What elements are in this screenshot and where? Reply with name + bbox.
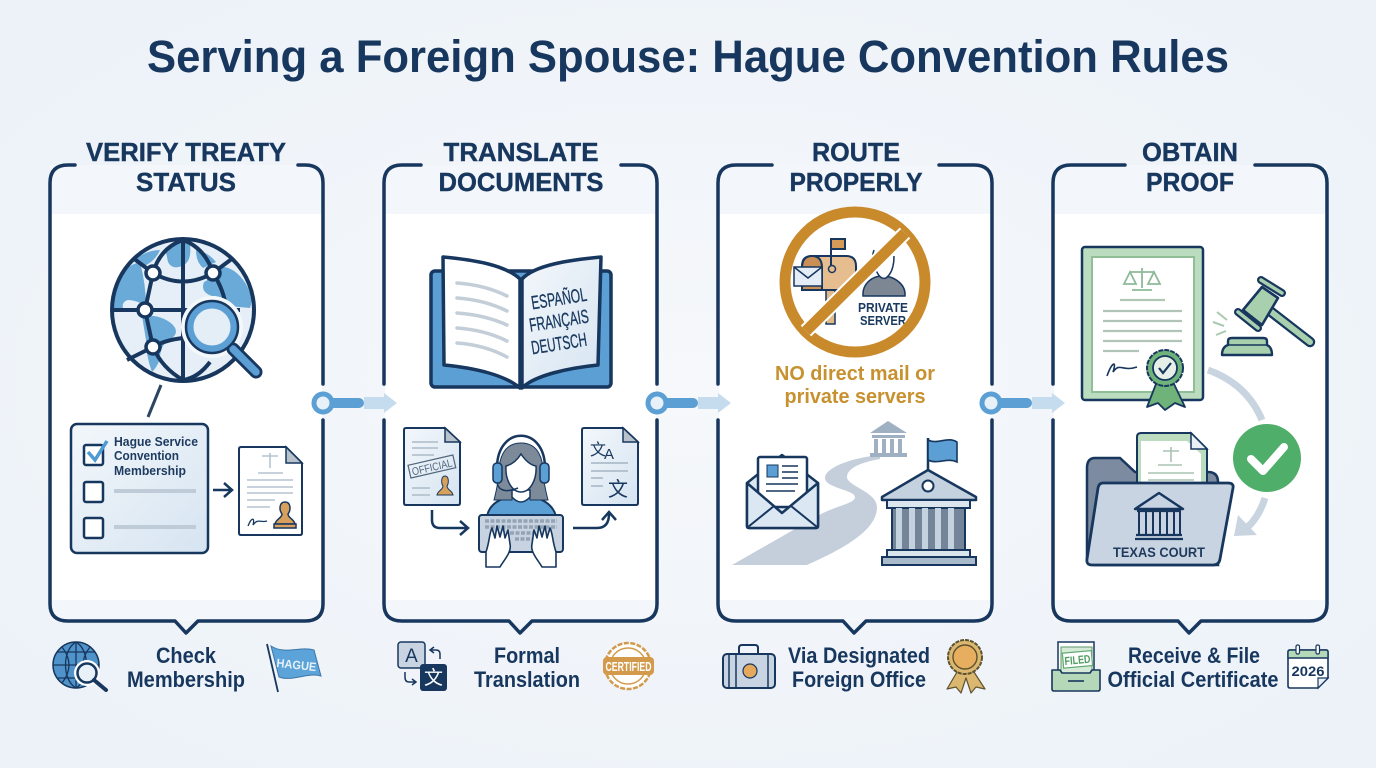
icon: Texas court folder <box>1087 433 1233 565</box>
warning text: NO direct mail or <box>775 363 935 385</box>
icon: certified badge: CERTIFIED <box>606 660 652 674</box>
title: Serving a Foreign Spouse: Hague Convention Rules <box>147 31 1229 82</box>
arrow: step 3 to step 4 <box>982 393 1065 413</box>
label: receive and file official certificate <box>1108 643 1278 692</box>
arrow: document to translator <box>432 510 468 535</box>
arrow: step 2 to step 3 <box>648 393 731 413</box>
icon: filed tray <box>1052 642 1100 691</box>
warning text: private servers <box>784 386 926 408</box>
heading: verify treaty status: VERIFY TREATY <box>86 137 286 167</box>
heading: obtain proof <box>1142 137 1238 197</box>
icon: translator with headset at keyboard <box>479 436 563 567</box>
footer: check membership <box>53 642 321 692</box>
icon: Hague flag: HAGUE <box>276 656 317 674</box>
icon: stamped document <box>239 447 302 535</box>
label: formal translation: Translation <box>474 667 580 692</box>
icon: translated document: 文 <box>608 478 628 501</box>
label: via designated foreign office: Foreign Office <box>792 667 926 692</box>
heading: translate documents: DOCUMENTS <box>438 167 604 197</box>
icon: open book: FRANÇAIS <box>528 307 590 337</box>
panel: obtain proof <box>1053 137 1327 633</box>
icon: prohibited mail and private server: PRIVATE <box>858 301 908 315</box>
warning text <box>775 363 935 408</box>
label: receive and file official certificate: Receive & File <box>1128 643 1260 668</box>
icon: translate symbols: A <box>405 646 418 667</box>
heading: obtain proof: PROOF <box>1146 167 1234 197</box>
icon: open book: DEUTSCH <box>530 330 588 359</box>
panel: verify treaty status <box>50 137 323 633</box>
icon: open book: ESPAÑOL <box>530 284 588 314</box>
icon: official document <box>404 428 460 505</box>
icon: briefcase <box>723 645 775 688</box>
icon: filed tray: FILED <box>1064 654 1091 668</box>
heading: verify treaty status <box>86 137 286 197</box>
arrow: check to folder <box>1234 498 1265 536</box>
connector line <box>148 385 161 417</box>
icon: gavel <box>1213 280 1310 355</box>
heading: translate documents: TRANSLATE <box>444 137 598 167</box>
icon: small distant courthouse <box>870 421 907 457</box>
icon: open book <box>431 257 611 388</box>
label: check membership: Check <box>156 643 217 668</box>
heading: route properly: PROPERLY <box>790 167 922 197</box>
icon: gold rosette <box>947 640 985 693</box>
footer: via designated foreign office <box>723 640 985 693</box>
icon: calendar 2026 <box>1288 645 1328 688</box>
arrow: checklist to document <box>213 483 232 497</box>
footer: formal translation <box>398 642 654 692</box>
label: formal translation: Formal <box>494 643 560 668</box>
icon: envelope with document <box>747 455 818 528</box>
checklist card <box>71 424 208 553</box>
arrow: step 1 to step 2 <box>314 393 397 413</box>
icon: official document: OFFICIAL <box>411 458 454 478</box>
icon: prohibited mail and private server <box>785 212 925 352</box>
label: via designated foreign office <box>788 643 930 692</box>
heading: verify treaty status: STATUS <box>136 167 236 197</box>
arrow: translator to translated document <box>573 512 616 528</box>
checklist card: Hague Service <box>114 435 198 449</box>
heading: translate documents <box>438 137 604 197</box>
icon: translated document: A <box>604 446 614 463</box>
icon: certificate with seal <box>1082 247 1203 410</box>
icon: small globe search <box>53 642 106 690</box>
icon: globe with magnifier <box>112 239 256 381</box>
icon: translated document <box>582 428 638 505</box>
panel: translate documents <box>384 137 657 633</box>
icon: Hague flag <box>267 644 321 692</box>
checklist card: Membership <box>114 464 186 478</box>
icon: translate symbols <box>398 642 447 691</box>
icon: green check <box>1233 424 1301 492</box>
checklist card: Convention <box>114 449 179 463</box>
heading: obtain proof: OBTAIN <box>1142 137 1238 167</box>
label: formal translation <box>474 643 580 692</box>
panel: route properly <box>718 137 992 633</box>
icon: certified badge <box>603 643 654 689</box>
label: check membership <box>127 643 245 692</box>
arrow: certificate arc to check <box>1208 370 1262 420</box>
label: check membership: Membership <box>127 667 245 692</box>
label: via designated foreign office: Via Designated <box>788 643 930 668</box>
label: receive and file official certificate: Official Certificate <box>1108 667 1278 692</box>
icon: translated document: 文 <box>590 441 606 459</box>
icon: Texas court folder: TEXAS COURT <box>1113 545 1206 560</box>
icon: courthouse with flag <box>882 438 976 565</box>
icon: calendar 2026: 2026 <box>1292 663 1325 679</box>
icon: translate symbols: 文 <box>424 667 443 689</box>
heading: route properly: ROUTE <box>812 137 900 167</box>
icon: prohibited mail and private server: SERVER <box>860 314 906 328</box>
road to small office <box>732 455 880 565</box>
footer: receive and file official certificate <box>1052 642 1328 692</box>
heading: route properly <box>790 137 922 197</box>
